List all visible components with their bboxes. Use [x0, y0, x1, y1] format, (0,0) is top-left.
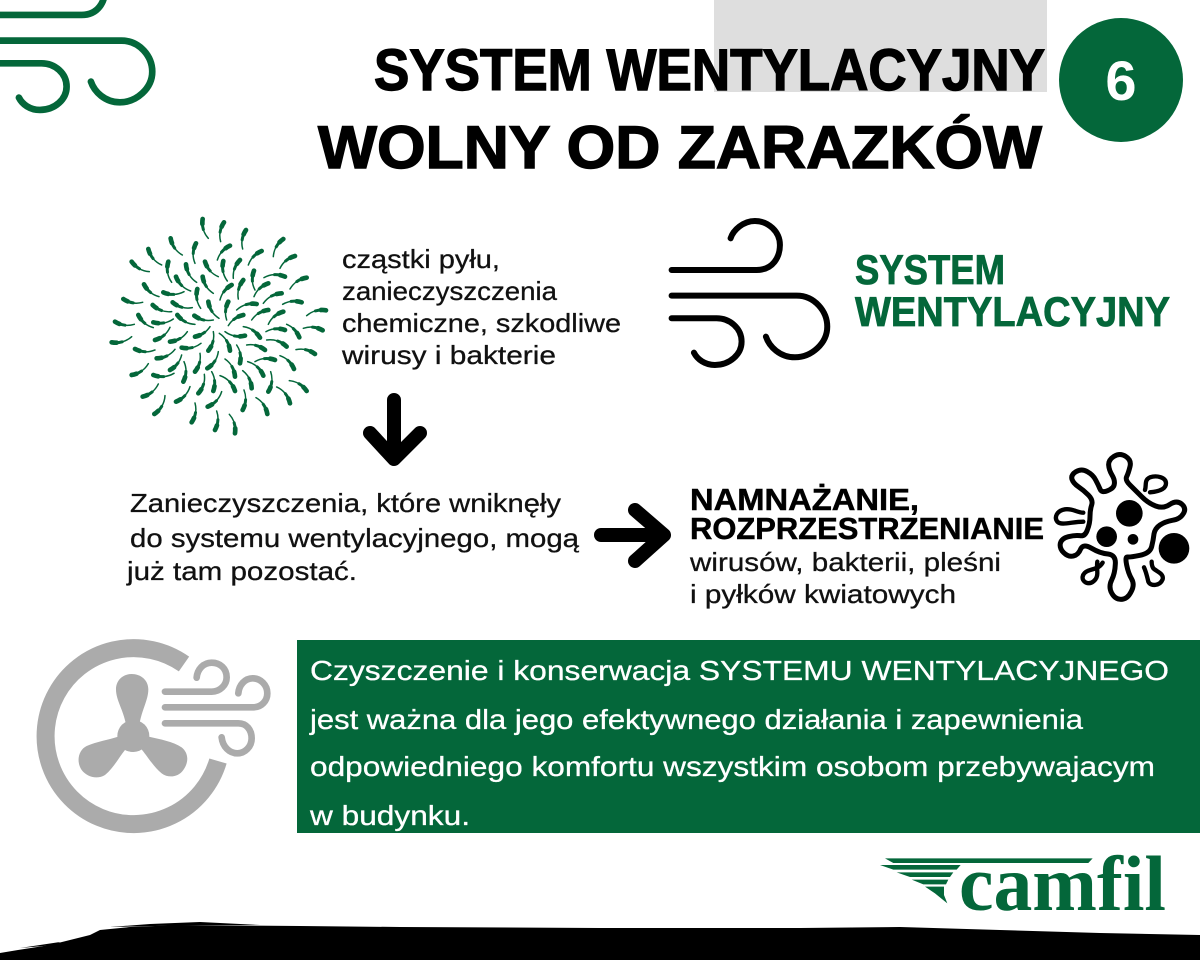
text: pollutants: zanieczyszczenia [342, 276, 558, 306]
icon: fan with air flow [46, 648, 267, 824]
heading: ventilation system: SYSTEM [855, 246, 1005, 293]
text: pollutants: chemiczne, szkodliwe [342, 308, 621, 338]
text: pollutants: cząstki pyłu, [342, 244, 500, 274]
heading: ventilation system: WENTYLACYJNY [855, 288, 1170, 335]
brush stroke footer [0, 922, 1200, 960]
arrow: right [601, 510, 664, 561]
text: contaminants remain: do systemu wentylacyjnego, mogą [130, 523, 580, 553]
number badge [1059, 18, 1183, 142]
text: spreading: i pyłków kwiatowych [690, 579, 956, 609]
text: spreading: wirusów, bakterii, pleśni [689, 547, 1001, 577]
number badge: 6 [1105, 49, 1137, 112]
text: pollutants [341, 244, 621, 370]
text: spreading: ROZPRZESTRZENIANIE [690, 511, 1044, 546]
panel: cleaning and maintenance: jest ważna dla jego efektywnego działania i zapewnienia [309, 704, 1083, 735]
arrow: down [370, 400, 420, 459]
panel: cleaning and maintenance: Czyszczenie i konserwacja SYSTEMU WENTYLACYJNEGO [310, 655, 1169, 686]
title: SYSTEM WENTYLACYJNY [374, 38, 1045, 103]
title [318, 38, 1045, 181]
panel: cleaning and maintenance: w budynku. [309, 800, 470, 831]
text: contaminants remain [126, 488, 580, 586]
text: contaminants remain: Zanieczyszczenia, które wniknęły [130, 488, 561, 518]
heading: ventilation system [855, 246, 1170, 335]
icon: particle burst [112, 219, 326, 433]
icon: wind [672, 221, 827, 365]
text: contaminants remain: już tam pozostać. [126, 556, 357, 586]
text: pollutants: wirusy i bakterie [341, 340, 556, 370]
logo: camfil: camfil [959, 840, 1166, 927]
panel: cleaning and maintenance [297, 640, 1200, 833]
text: spreading [689, 482, 1044, 609]
panel: cleaning and maintenance: odpowiedniego komfortu wszystkim osobom przebywajacym [310, 751, 1155, 782]
icon: green wind corner [0, 0, 152, 110]
gray header block [714, 0, 1047, 92]
text: spreading: NAMNAŻANIE, [690, 482, 919, 517]
icon: virus [1056, 454, 1189, 599]
title: WOLNY OD ZARAZKÓW [318, 114, 1042, 181]
